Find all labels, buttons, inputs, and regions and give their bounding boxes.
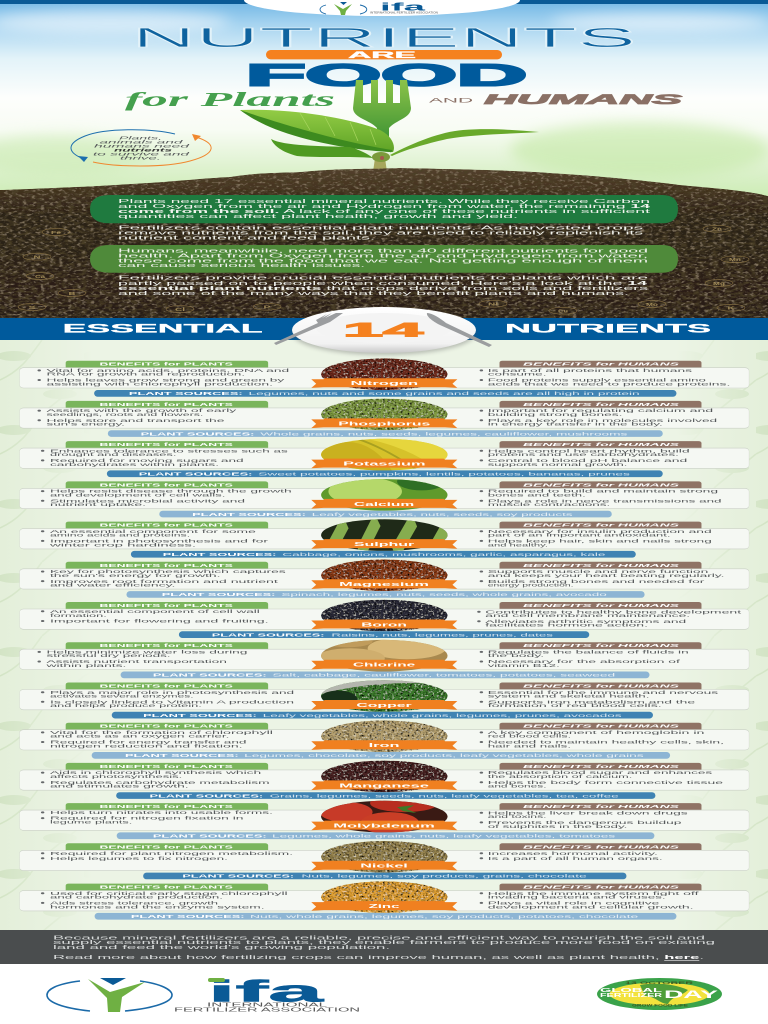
cycle callout: plants, animals and humans need nutrients (71, 130, 211, 166)
row: Nitrogen: RNA for growth and reproduction. (47, 372, 245, 377)
row: Iron: Required for energy transfer and (50, 740, 247, 745)
row: Boron: formation. (50, 613, 107, 618)
title: ARE pill (266, 50, 502, 60)
logo: Global Fertilizer Day: DAY (664, 989, 720, 1001)
row: Potassium: drought and diseases. (50, 452, 177, 457)
row: Zinc: Zinc (369, 903, 401, 909)
row: Chlorine: Regulates the balance of fluids in (488, 650, 689, 655)
icon: plate with cutlery and 14: 14 (343, 319, 424, 341)
row: Potassium: Helps control heart rhythm, build (488, 449, 690, 454)
row: Molybdenum: Prevents the dangerous buildup (488, 820, 682, 825)
row: Boron: Alleviates arthritic symptoms and (485, 619, 687, 624)
row: Copper: activates several enzymes. (50, 694, 194, 699)
row: Potassium: BENEFITS for PLANTS (100, 441, 234, 447)
row: Nickel: Nickel (360, 863, 408, 869)
soil element labels: S (28, 305, 36, 310)
row: Boron: BENEFITS for HUMANS (523, 602, 680, 608)
row: Zinc: Used for critical early stage chlorophyll (50, 891, 289, 896)
row: Nitrogen: Legumes, nuts and some grains and seeds are all high in protein (249, 391, 640, 396)
row: Nickel: PLANT SOURCES: (182, 874, 294, 879)
row: Calcium (20, 479, 750, 518)
row: Nitrogen: Food proteins supply essential amino (488, 378, 706, 383)
title: AND: AND (429, 97, 474, 104)
row: Zinc: PLANT SOURCES: (131, 914, 245, 919)
panel: humans need 40 nutrients: can cause serious health issues. (118, 263, 366, 269)
row: Iron (20, 720, 749, 759)
panel: plants need 17 nutrients: come from the soil. A lack of any one of these nutrients in sufficient (118, 209, 651, 215)
soil element labels: Mn (729, 257, 741, 262)
row: Potassium: Enhances tolerance to stresses such as (50, 449, 289, 454)
logo: Global Fertilizer Day: GLOBAL (600, 988, 664, 994)
row: Magnesium: and water efficiency. (50, 583, 176, 588)
row: Copper: and helps produce protein. (50, 703, 202, 708)
row: Copper: Copper (356, 702, 413, 708)
row: Calcium: muscle contractions. (488, 502, 610, 507)
row: Copper: Supports iron metabolism and the (488, 700, 695, 705)
row: Nitrogen: Helps leaves grow strong and green by (47, 378, 285, 383)
row: Sulphur: PLANT SOURCES: (163, 552, 276, 557)
row: Nickel: Required for plant nitrogen metabolism. (50, 851, 293, 856)
row: Calcium: Leafy vegetables, nuts, seeds, soy products (312, 512, 573, 517)
panel: plants need 17 nutrients (90, 195, 678, 223)
soil element labels (18, 225, 749, 314)
row: Iron: Legumes, chocolate, soy products, leafy vegetables, whole grains (244, 753, 644, 758)
row: Phosphorus: Assists with the growth of early (47, 408, 237, 413)
row: Boron: Contributes to healthy bone development (485, 609, 741, 615)
row: Boron: An essential component of cell wall (50, 609, 261, 614)
row: Nickel: Nuts, legumes, soy products, grains, chocolate (301, 874, 587, 879)
soil element labels: Ni (488, 302, 498, 306)
row: Molybdenum: Legumes, whole grains, nuts, leafy vegetables, tomatoes (272, 834, 616, 839)
row: Boron: Boron (361, 621, 408, 628)
row: Iron: hair and nails. (488, 744, 571, 749)
row: Phosphorus: PLANT SOURCES: (141, 431, 254, 437)
row: Chlorine: PLANT SOURCES: (153, 673, 267, 678)
row: Boron: PLANT SOURCES: (212, 633, 325, 638)
row: Magnesium: BENEFITS for HUMANS (523, 562, 680, 568)
logo: Global Fertilizer Day (597, 978, 722, 1010)
row: Iron: nitrogen reduction and fixation. (50, 744, 243, 749)
logo: IFA: FERTILIZER ASSOCIATION (174, 1008, 360, 1014)
row: Zinc: Aids stress tolerance, growth (50, 901, 218, 906)
text block: fertilizers provide nutrients: partly passed on to people when consumed. Here's a look at the 14 (118, 281, 650, 287)
text block: fertilizers provide nutrients: Fertilizers provide crucial essential nutrients to plants which are (118, 276, 648, 282)
row: Phosphorus: sun's energy. (47, 422, 125, 427)
logo: Global Fertilizer Day: GROW FOOD LIFE (632, 1004, 689, 1008)
row: Phosphorus: Helps store and transport the (47, 418, 225, 423)
row: Chlorine: Chlorine (353, 662, 417, 668)
row: Nitrogen (20, 358, 749, 397)
row: Manganese: PLANT SOURCES: (150, 793, 263, 799)
row: Nickel: Is a part of all human organs. (488, 856, 663, 861)
footer text band: land and feed the world's growing population. (53, 945, 391, 951)
panel: plants need 17 nutrients: and Oxygen from the air and Hydrogen from water, the remaining 14 (118, 204, 653, 210)
footer text band (0, 930, 768, 964)
row: Copper: Is closely linked to Vitamin A production (50, 700, 294, 705)
logo: Global Fertilizer Day: 13 OCTOBER (625, 980, 693, 985)
text block: fertilizers contain nutrients: remove nutrients from the soil, they are used to reliably replenish its (118, 231, 643, 237)
row: Nitrogen: BENEFITS for HUMANS (523, 361, 680, 367)
row: Potassium: proteins and use carbohydrates. (488, 452, 679, 457)
row: Sulphur (20, 518, 749, 558)
row: Potassium: PLANT SOURCES: (139, 472, 252, 477)
panel: humans need 40 nutrients (90, 245, 678, 273)
row: Magnesium (20, 560, 749, 598)
text block: fertilizers provide nutrients: essential plant nutrients that crops derive from soils and fertilizers (118, 286, 648, 292)
row: Molybdenum: Required for nitrogen fixation in (50, 816, 244, 821)
row: Manganese: and stimulates growth. (50, 784, 189, 789)
row: Molybdenum (20, 800, 750, 840)
row: Magnesium: the sun's energy for growth. (50, 573, 221, 578)
row: Manganese: Regulates blood sugar and enhances (488, 770, 713, 775)
heading band: essential 14 nutrients (0, 318, 768, 340)
row: Magnesium: Spinach, legumes, nuts, seeds, whole grains, avocado (281, 592, 607, 597)
row: Nickel: Increases hormonal activity. (488, 851, 658, 856)
row: Zinc: hormones and the enzyme system. (50, 904, 265, 910)
row: Magnesium: Builds strong bones and needed for (488, 579, 708, 584)
row: Phosphorus: BENEFITS for PLANTS (100, 401, 234, 407)
row: Phosphorus: Plays a key role in molecules involved (488, 418, 717, 423)
row: Iron: A key component of hemoglobin in (488, 730, 705, 735)
row: Chlorine: BENEFITS for HUMANS (523, 642, 680, 648)
row: Copper: formation of red blood cells. (488, 703, 662, 708)
row: Phosphorus: seedlings, roots and flowers. (47, 412, 204, 417)
footer text band: supply essential nutrients to plants, they enable farmers to produce more food on existing (53, 940, 715, 946)
row: Calcium: Required to build and maintain strong (488, 489, 718, 494)
row: Chlorine: within plants. (47, 663, 127, 668)
row: Zinc: development and cellular growth. (488, 904, 694, 910)
row: Iron: and acts as an oxygen carrier. (50, 734, 230, 739)
row: Molybdenum: Helps turn nitrates into usable forms. (50, 810, 273, 815)
icon: plate with cutlery and 14 (274, 307, 492, 355)
footer text band: Because mineral fertilizers are a reliable, precise and efficient way to nourish the soil and (53, 935, 705, 941)
row: Copper: BENEFITS for PLANTS (100, 682, 234, 689)
row: Manganese: Manganese (339, 782, 431, 789)
row: Nitrogen: Vital for amino acids, proteins, DNA and (47, 368, 289, 373)
soil element labels: Cu (558, 308, 568, 314)
row: Calcium: nutrient uptake. (50, 502, 146, 507)
row: Boron: and cell membrane maintenance. (485, 613, 690, 618)
row: Zinc: and carbohydrate production. (50, 895, 223, 900)
cycle callout: plants, animals and humans need nutrients: nutrients (114, 148, 173, 153)
logo: IFA: INTERNATIONAL (207, 1003, 327, 1009)
row: Manganese: affects photosynthesis. (50, 774, 182, 779)
logo: Global Fertilizer Day: FERTILIZER (600, 993, 662, 999)
panel: humans need 40 nutrients: health. Apart from Oxygen from the air and Hydrogen from water, (118, 254, 649, 260)
row: Calcium: PLANT SOURCES: (192, 512, 306, 517)
title: HUMANS: HUMANS (484, 92, 682, 107)
row: Boron: Raisins, nuts, legumes, prunes, dates (331, 633, 554, 638)
row: Phosphorus: in energy transfer in the body. (488, 422, 663, 427)
row: Phosphorus: BENEFITS for HUMANS (523, 401, 680, 407)
row: Chlorine: vitamin B12. (488, 663, 560, 668)
row: Calcium: Calcium (354, 501, 414, 507)
row: Phosphorus: building strong bones. (488, 412, 623, 417)
row: Zinc: Plays a vital role in cognitive (488, 901, 660, 906)
row: Iron: red blood cells. (488, 734, 571, 739)
row: Zinc: BENEFITS for HUMANS (523, 884, 680, 890)
row: Chlorine: Salt, cabbage, cauliflower, tomatoes, potatoes, seaweed (273, 673, 615, 678)
row: Manganese (20, 761, 749, 799)
row: Nickel: Helps legumes to fix nitrogen. (50, 856, 228, 861)
row: Molybdenum: and toxins. (488, 814, 547, 819)
row: Chlorine: Helps minimize water loss during (47, 650, 248, 655)
footer white area (0, 964, 768, 1024)
top logo badge (244, 0, 520, 16)
footer text band: Read more about how fertilizing crops can improve human, as well as plant health, here . (53, 955, 705, 961)
soil element labels: Cl (175, 307, 185, 312)
row: Magnesium: energy production. (488, 583, 574, 588)
soil element labels: B (68, 291, 77, 296)
text block: fertilizers provide nutrients (118, 276, 650, 297)
row: Molybdenum: of sulphites in the body. (488, 824, 628, 829)
row: Nitrogen: Is part of all proteins that humans (488, 368, 693, 373)
soil element labels: Mo (646, 302, 658, 307)
top bar (0, 0, 768, 4)
row: Sulphur: Sulphur (354, 541, 415, 547)
row: Chlorine: stressful dry periods. (47, 653, 171, 658)
cycle callout: plants, animals and humans need nutrients: humans need (94, 144, 191, 149)
row: Sulphur: Necessary for insulin production and (488, 529, 712, 534)
row: Manganese: BENEFITS for PLANTS (100, 763, 234, 769)
row: Manganese: Aids in chlorophyll synthesis which (50, 770, 262, 775)
row: Iron: Needed to maintain healthy cells, skin, (488, 740, 724, 745)
row: Copper (20, 678, 749, 718)
title: ARE pill: ARE (348, 50, 416, 60)
icon: green fork (353, 80, 411, 140)
soil element labels: Zn (712, 226, 722, 232)
soil element labels: Fe (51, 230, 62, 235)
row: Manganese: Grains, legumes, seeds, nuts, leafy vegetables, tea, coffee (270, 793, 619, 799)
row: Manganese: the absorption of calcium. (488, 774, 632, 779)
cycle callout: plants, animals and humans need nutrients: to survive and (93, 152, 190, 157)
row: Nitrogen: assisting with chlorophyll production. (47, 382, 273, 387)
row: Molybdenum: PLANT SOURCES: (153, 834, 267, 839)
panel: humans need 40 nutrients: Humans, meanwhile, need more than 40 different nutrients for good (118, 249, 648, 255)
soil element labels: K (728, 306, 736, 310)
row: Potassium: carbohydrates within plants. (50, 462, 219, 467)
row: Magnesium: Improves root formation and nutrient (50, 579, 278, 584)
row: Potassium: Potassium (343, 460, 425, 467)
row: Phosphorus: Whole grains, nuts, seeds, legumes, cauliflower, mushrooms (260, 431, 628, 437)
text block: fertilizers contain nutrients: nutrient content and feed plants. (118, 236, 376, 242)
row: Manganese: and bones. (488, 784, 547, 789)
row: Molybdenum: BENEFITS for HUMANS (523, 803, 680, 809)
row: Phosphorus: Phosphorus (338, 420, 432, 427)
row: Manganese: BENEFITS for HUMANS (523, 763, 680, 769)
row: Potassium: supports normal growth. (488, 462, 628, 467)
row: Nitrogen: acids that we need to produce proteins. (488, 382, 731, 387)
soil element labels: N (34, 254, 42, 260)
row: Iron: Vital for the formation of chlorophyll (50, 730, 274, 735)
logo: IFA (47, 974, 360, 1014)
row: Manganese: Regulates carbohydrate metabolism (50, 780, 270, 785)
top logo badge: INTERNATIONAL FERTILIZER ASSOCIATION (370, 11, 438, 15)
row: Chlorine: Necessary for the absorption of (488, 659, 680, 664)
row: Potassium: Required for moving sugars and (50, 458, 244, 463)
panel: plants need 17 nutrients: quantities can affect plant health, growth and yield. (118, 214, 519, 220)
row: Copper: Leafy vegetables, whole grains, legumes, prunes, avocados (263, 713, 622, 718)
row: Chlorine (20, 635, 749, 678)
text block: fertilizers provide nutrients: and some of the many ways that they benefit plants and humans. (118, 291, 630, 297)
row: Copper: Plays a major role in photosynthesis and (50, 690, 294, 695)
row: Potassium: BENEFITS for HUMANS (523, 441, 680, 447)
row: Chlorine: BENEFITS for PLANTS (100, 642, 234, 648)
text block: fertilizers contain nutrients: Fertilizers contain essential plant nutrients. As harvested crops (118, 226, 643, 232)
row: Iron: BENEFITS for HUMANS (523, 723, 680, 729)
row: Magnesium: Supports muscle and nerve function (488, 569, 709, 574)
row: Calcium: BENEFITS for PLANTS (100, 481, 234, 488)
row: Sulphur: winter crop hardiness. (50, 542, 196, 548)
soil element labels: Mg (713, 281, 725, 286)
row: Copper: PLANT SOURCES: (143, 713, 257, 718)
row: Molybdenum: Helps the liver break down drugs (488, 811, 689, 816)
row: Boron: BENEFITS for PLANTS (100, 602, 234, 608)
row: Sulphur: part of an important antioxidant. (488, 533, 671, 538)
row: Chlorine: Assists nutrient transportation (47, 659, 227, 664)
row: Boron: facilitates hormone action. (485, 623, 648, 628)
row: Phosphorus (20, 399, 749, 437)
row: Calcium: and development of cell walls. (50, 493, 226, 498)
row: Nitrogen: BENEFITS for PLANTS (100, 361, 234, 367)
row: Magnesium: Key for photosynthesis which captures (50, 569, 287, 574)
cycle callout: plants, animals and humans need nutrients: thrive. (120, 155, 161, 160)
panel: humans need 40 nutrients: these come from the food that we eat. Not getting enough of them (118, 259, 649, 265)
row: Copper: Essential for the immune and nervous (488, 690, 719, 695)
row: Boron (20, 600, 749, 638)
cycle callout: plants, animals and humans need nutrients: Plants, (119, 136, 162, 141)
row: Sulphur: and healthy. (488, 542, 548, 548)
row: Zinc: BENEFITS for PLANTS (100, 884, 234, 890)
row: Nickel: BENEFITS for PLANTS (100, 843, 234, 850)
row: Magnesium: and keeps your heart beating regularly. (488, 573, 725, 578)
row: Nitrogen: Nitrogen (350, 380, 419, 386)
title: for Plants: for Plants (125, 89, 336, 111)
row: Sulphur: Important in photosynthesis and for (50, 539, 272, 544)
row: Magnesium: Magnesium (339, 581, 429, 587)
row: Chlorine: the body. (488, 653, 544, 658)
row: Zinc: invading bacteria and viruses. (488, 895, 666, 900)
row: Nitrogen: consume. (488, 372, 547, 377)
row: Potassium: Sweet potatoes, pumpkins, lentils, potatoes, bananas, prunes (258, 472, 631, 477)
row: Copper: system and skeletal health. (488, 694, 650, 699)
row: Sulphur: An essential component for some (50, 529, 256, 534)
nutrients section background (0, 340, 768, 930)
row: Nickel (20, 841, 749, 879)
top logo badge: ifa (380, 2, 428, 14)
soil element labels: Ca (35, 274, 46, 279)
soil element labels: P (264, 304, 270, 310)
row: Copper: BENEFITS for HUMANS (523, 682, 680, 689)
row: Manganese: Helps the body form connective tissue (488, 780, 723, 785)
row: Potassium (20, 437, 749, 477)
row: Sulphur: BENEFITS for PLANTS (100, 522, 234, 528)
panel: plants need 17 nutrients: Plants need 17 essential mineral nutrients. While they receive Carbon (118, 199, 650, 205)
row: Magnesium: PLANT SOURCES: (162, 592, 275, 597)
row: Calcium: bones and teeth. (488, 493, 586, 498)
row: Sulphur: Helps keep hair, skin and nails strong (488, 539, 712, 544)
row: Iron: BENEFITS for PLANTS (100, 723, 234, 729)
row: Sulphur: BENEFITS for HUMANS (523, 522, 680, 528)
row: Iron: PLANT SOURCES: (125, 753, 239, 758)
row: Calcium: Helps resist disease through the growth (50, 489, 292, 494)
row: Nickel: BENEFITS for HUMANS (523, 843, 680, 850)
row: Sulphur: Cabbage, onions, mushrooms, garlic, asparagus, kale (282, 552, 605, 557)
row: Iron: Iron (369, 742, 400, 748)
row: Boron: Important for flowering and fruiting. (50, 619, 269, 624)
heading band: essential 14 nutrients: NUTRIENTS (505, 324, 712, 336)
logo: IFA: ifa (208, 974, 325, 1008)
row: Calcium: BENEFITS for HUMANS (523, 481, 680, 488)
title: NUTRIENTS: NUTRIENTS (132, 22, 636, 53)
row: Molybdenum: BENEFITS for PLANTS (100, 803, 234, 809)
row: Potassium: Central to blood pH balance and (488, 458, 688, 463)
sky background (0, 0, 768, 196)
row: Phosphorus: Important for regulating calcium and (488, 408, 714, 413)
row: Zinc: Helps the immune system fight off (488, 891, 699, 896)
row: Molybdenum: Molybdenum (333, 822, 435, 829)
row: Magnesium: BENEFITS for PLANTS (100, 562, 234, 568)
text block: fertilizers contain nutrients (118, 226, 643, 242)
soil (0, 168, 768, 320)
row: Molybdenum: legume plants. (50, 820, 132, 825)
icon: seedling (240, 110, 539, 172)
cycle callout: plants, animals and humans need nutrients: animals and (100, 140, 184, 145)
row: Zinc (20, 881, 749, 920)
row: Calcium: Stimulates microbial activity and (50, 499, 245, 504)
row: Sulphur: amino acids and proteins. (50, 533, 190, 538)
title: FOOD: FOOD (246, 57, 527, 92)
row: Calcium: Plays a role in nerve transmissions and (488, 499, 722, 504)
row: Nitrogen: PLANT SOURCES: (129, 391, 243, 396)
heading band: essential 14 nutrients: ESSENTIAL (63, 324, 263, 336)
row: Zinc: Nuts, whole grains, legumes, soy products, potatoes, chocolate (250, 914, 638, 919)
